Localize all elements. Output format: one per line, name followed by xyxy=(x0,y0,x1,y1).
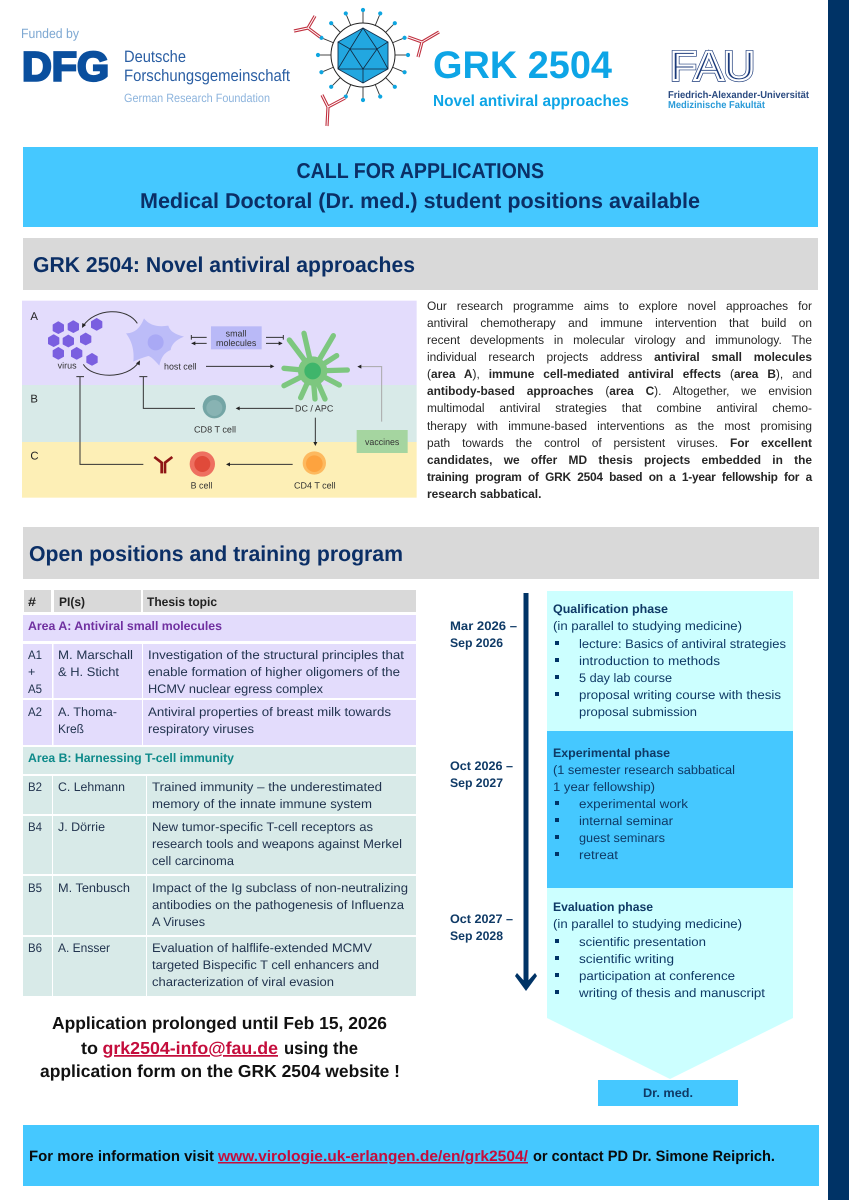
icon: host cell xyxy=(126,318,184,366)
application deadline callout: to xyxy=(81,1038,98,1058)
arrow: vaccines to DC xyxy=(357,365,382,422)
panel: qualification phase: proposal submission xyxy=(579,705,697,719)
application deadline callout: grk2504-info@fau.de xyxy=(102,1038,278,1058)
row B2: memory of the innate immune system xyxy=(152,797,372,811)
area B heading xyxy=(23,747,416,774)
GRK 2504 title logo: Novel antiviral approaches xyxy=(433,93,629,110)
text block: research programme description: antibody-based approaches (area C). Altogether, we envision xyxy=(427,384,812,398)
row B6: A. Ensser xyxy=(58,941,110,955)
FAU university logo: Medizinische Fakultät xyxy=(668,100,766,111)
row B5 xyxy=(23,876,416,935)
row A1 + A5 xyxy=(23,644,416,698)
row A2: Antiviral properties of breast milk towards xyxy=(148,705,391,719)
row A1 + A5: enable formation of higher oligomers of the xyxy=(148,665,400,679)
text block: research programme description: antiviral chemotherapy and immune intervention that build on xyxy=(427,316,812,330)
row B4: cell carcinoma xyxy=(152,854,234,868)
panel: evaluation phase: scientific presentation xyxy=(579,935,706,949)
DFG funder logo: Deutsche xyxy=(124,48,186,66)
section heading: GRK 2504 xyxy=(23,238,818,290)
row A1 + A5: A1 xyxy=(28,648,42,662)
row B5: A Viruses xyxy=(152,915,205,929)
GRK 2504 title logo xyxy=(433,44,629,110)
timeline date labels: Oct 2027 – xyxy=(450,912,513,926)
panel: experimental phase: guest seminars xyxy=(579,831,665,845)
timeline date labels: Mar 2026 – xyxy=(450,619,517,633)
application deadline callout xyxy=(40,1013,400,1081)
panel: experimental phase: 1 year fellowship) xyxy=(553,780,655,794)
row A2 xyxy=(23,700,416,745)
panel: evaluation phase xyxy=(547,888,793,1079)
diagram: antiviral approaches by area: DC / APC xyxy=(295,404,333,414)
timeline date labels: Sep 2027 xyxy=(450,776,503,790)
row B2: C. Lehmann xyxy=(58,780,125,794)
text block: research programme description: multimodal antiviral strategies that combine antiviral chemo- xyxy=(427,401,812,415)
panel: evaluation phase: (in parallel to studying medicine) xyxy=(553,917,742,931)
box: small molecules xyxy=(211,326,262,349)
panel: experimental phase: internal seminar xyxy=(579,814,673,828)
table header: PI(s) xyxy=(59,595,85,609)
panel: qualification phase xyxy=(547,591,793,731)
text block: research programme description: research sabbatical. xyxy=(427,487,541,501)
DFG funder logo: DFG xyxy=(22,44,109,90)
panel: qualification phase: (in parallel to studying medicine) xyxy=(553,619,742,633)
arrow: DC to CD8 T cell xyxy=(236,406,293,410)
row B4: B4 xyxy=(28,820,42,834)
arrow: DC to CD4 T cell xyxy=(313,418,317,446)
row A1 + A5: Investigation of the structural principles that xyxy=(148,648,405,662)
text block: research programme description: path towards the control of persistent viruses. For excellent xyxy=(427,436,812,450)
box: small molecules: molecules xyxy=(216,338,256,348)
footer: contact information: For more information visit xyxy=(29,1148,214,1165)
text block: research programme description: therapy with immune-based interventions as the most promising xyxy=(427,419,812,433)
text block: research programme description: individual research projects address antiviral small molecules xyxy=(427,350,812,364)
row A2: A2 xyxy=(28,705,42,719)
footer: contact information: www.virologie.uk-erlangen.de/en/grk2504/ xyxy=(217,1148,529,1165)
footer: contact information: or contact PD Dr. Simone Reiprich. xyxy=(533,1148,775,1165)
row B6: Evaluation of halflife-extended MCMV xyxy=(152,941,373,955)
diagram: antiviral approaches by area: CD4 T cell xyxy=(294,481,336,491)
row B4: J. Dörrie xyxy=(58,820,105,834)
GRK 2504 title logo: GRK 2504 xyxy=(433,44,613,87)
row B4: research tools and weapons against Merkel xyxy=(152,837,402,851)
application deadline callout: using the xyxy=(284,1038,358,1058)
panel: experimental phase: (1 semester research sabbatical xyxy=(553,763,735,777)
box: small molecules: small xyxy=(226,329,246,339)
row B5: B5 xyxy=(28,881,42,895)
application deadline callout: application form on the GRK 2504 website ! xyxy=(40,1061,400,1081)
timeline date labels: Sep 2028 xyxy=(450,929,503,943)
area B heading: Area B: Harnessing T-cell immunity xyxy=(28,751,234,765)
icon: CD8 T cell xyxy=(203,395,226,418)
inhibition line: CD8 T cell to host cell xyxy=(139,377,195,408)
panel: evaluation phase: writing of thesis and manuscript xyxy=(578,986,766,1000)
diagram: antiviral approaches by area: CD8 T cell xyxy=(194,424,236,434)
table header: # xyxy=(28,595,36,609)
row B2 xyxy=(23,776,416,814)
DFG funder logo xyxy=(21,26,290,105)
icon: dendritic cell xyxy=(284,333,347,399)
section heading: open positions xyxy=(23,527,819,579)
diagram: antiviral approaches by area: virus xyxy=(58,360,77,370)
table: thesis topics xyxy=(23,590,416,996)
FAU university logo: FAU xyxy=(670,43,755,89)
DFG funder logo: Forschungsgemeinschaft xyxy=(124,67,290,85)
panel: qualification phase: introduction to methods xyxy=(579,654,720,668)
panel: qualification phase: 5 day lab course xyxy=(579,671,672,685)
row B4 xyxy=(23,816,416,874)
panel: qualification phase: proposal writing course with thesis xyxy=(579,688,781,702)
DFG funder logo: German Research Foundation xyxy=(124,91,270,105)
DFG funder logo: Funded by xyxy=(21,26,79,41)
row B6: B6 xyxy=(28,941,42,955)
table header xyxy=(24,590,416,612)
banner: call for applications: CALL FOR APPLICATIONS xyxy=(296,159,544,183)
row B5: Impact of the Ig subclass of non-neutralizing xyxy=(152,881,408,895)
box: vaccines xyxy=(357,430,408,453)
arrow: CD4 T cell to B cell xyxy=(226,462,293,466)
row A1 + A5: HCMV nuclear egress complex xyxy=(148,682,324,696)
area A heading: Area A: Antiviral small molecules xyxy=(28,619,222,633)
timeline date labels: Oct 2026 – xyxy=(450,759,513,773)
panel: experimental phase: retreat xyxy=(579,848,619,862)
section heading: open positions: Open positions and training program xyxy=(29,542,403,566)
panel: qualification phase: lecture: Basics of antiviral strategies xyxy=(579,637,786,651)
row A1 + A5: + xyxy=(28,665,35,679)
table header: Thesis topic xyxy=(147,595,217,609)
row B6 xyxy=(23,937,416,996)
inhibition line: antibody to virus xyxy=(76,377,143,464)
diagram: antiviral approaches by area: host cell xyxy=(164,362,197,372)
diagram: antiviral approaches by area: B cell xyxy=(191,481,212,491)
area A heading xyxy=(23,615,416,641)
icon: virus particles xyxy=(49,319,102,365)
row B2: Trained immunity – the underestimated xyxy=(152,780,382,794)
panel: evaluation phase: Evaluation phase xyxy=(553,900,653,914)
section heading: GRK 2504: GRK 2504: Novel antiviral approaches xyxy=(33,253,415,277)
icon: antibody xyxy=(154,457,172,473)
panel: evaluation phase: participation at conference xyxy=(579,969,735,983)
row B2: B2 xyxy=(28,780,42,794)
diagram: antiviral approaches by area: C xyxy=(30,450,39,462)
box: vaccines: vaccines xyxy=(365,437,399,447)
text block: research programme description xyxy=(427,299,812,501)
icon: virus with antibodies xyxy=(294,8,439,126)
application deadline callout: Application prolonged until Feb 15, 2026 xyxy=(52,1013,387,1033)
timeline date labels: Sep 2026 xyxy=(450,636,503,650)
diagram: antiviral approaches by area xyxy=(22,301,417,498)
FAU university logo: Friedrich-Alexander-Universität xyxy=(668,90,810,101)
arrows: virus replication cycle xyxy=(82,312,140,375)
row A1 + A5: A5 xyxy=(28,682,42,696)
arrow: host cell to DC xyxy=(206,364,274,368)
row B6: targeted Bispecific T cell enhancers and xyxy=(152,958,379,972)
row A2: A. Thoma- xyxy=(58,705,117,719)
timeline arrow xyxy=(515,593,537,991)
row A2: respiratory viruses xyxy=(148,722,254,736)
text block: research programme description: candidates, we offer MD thesis projects embedded in the xyxy=(427,453,812,467)
text block: research programme description: Our research programme aims to explore novel approaches for xyxy=(427,299,812,313)
banner: call for applications: Medical Doctoral (Dr. med.) student positions available xyxy=(140,189,700,213)
diagram: antiviral approaches by area: A xyxy=(30,310,38,323)
row A1 + A5: M. Marschall xyxy=(58,648,133,662)
diagram: antiviral approaches by area: B xyxy=(30,393,38,405)
panel: evaluation phase: scientific writing xyxy=(579,952,674,966)
footer: contact information xyxy=(23,1125,819,1186)
right navy sidebar xyxy=(828,0,849,1200)
banner: call for applications xyxy=(23,147,818,227)
panel: experimental phase: Experimental phase xyxy=(553,746,670,760)
icon: B cell xyxy=(190,451,215,477)
row B6: characterization of viral evasion xyxy=(152,975,334,989)
FAU university logo: FAU xyxy=(670,43,755,89)
timeline date labels xyxy=(450,619,517,943)
row B4: New tumor-specific T-cell receptors as xyxy=(152,820,373,834)
text block: research programme description: recent developments in molecular virology and immunology. The xyxy=(427,333,812,347)
icon: CD4 T cell xyxy=(303,451,326,475)
FAU university logo xyxy=(668,43,810,111)
row B5: antibodies on the pathogenesis of Influenza xyxy=(152,898,404,912)
panel: experimental phase xyxy=(547,731,793,888)
row B5: M. Tenbusch xyxy=(58,881,130,895)
outcome box: Dr. med. xyxy=(598,1080,738,1106)
text block: research programme description: training program of GRK 2504 based on a 1-year fellowship for a xyxy=(427,470,812,484)
panel: qualification phase: Qualification phase xyxy=(553,602,668,616)
panel: experimental phase: experimental work xyxy=(579,797,689,811)
outcome box: Dr. med.: Dr. med. xyxy=(643,1086,693,1100)
text block: research programme description: (area A), immune cell-mediated antiviral effects (area B), and xyxy=(427,367,812,381)
arrows: small molecule effects xyxy=(191,335,283,345)
row A1 + A5: & H. Sticht xyxy=(58,665,120,679)
row A2: Kreß xyxy=(58,722,84,736)
